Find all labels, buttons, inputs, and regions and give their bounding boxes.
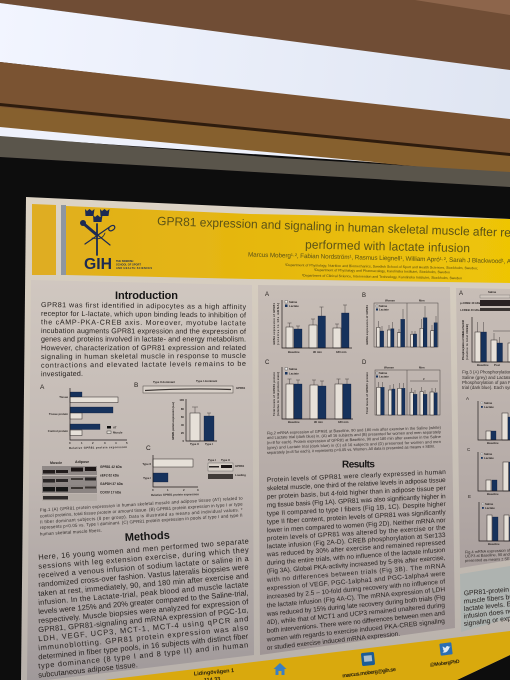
figure 3A: bar chart: Post (494, 363, 500, 367)
address: Lidingövägen 1 (194, 668, 234, 677)
text block: results: lactate infusion (Fig 2A-D). CREB phosphorylation at Ser133 (267, 532, 446, 550)
figure 2B: bar chart by sex (362, 293, 438, 347)
figure 1A: horizontal bar chart: Tissue protein (49, 412, 68, 416)
text block: results: type II compared to type I fibers (Fig 1B, 1C). Despite higher (267, 501, 447, 518)
figure 3A: phospho-CREB blot: Saline (488, 290, 497, 294)
text block: methods: type dominance (8 type I and 8 type II) and in human (38, 640, 249, 670)
icon: twitter (439, 642, 453, 656)
affiliations (285, 263, 478, 280)
figure 2D: bar chart by sex (362, 360, 440, 415)
figure 1B: fiber type bar chart: Type II (190, 442, 199, 446)
text block: methods: GPR81, GPR81-signaling and mRNA expression of PGC-1α, (38, 605, 249, 634)
figure 1: tissue western blots: GPR81 42 kDa (100, 465, 122, 469)
figure 1A: horizontal bar chart: Tissue (59, 395, 68, 399)
caption: figure 4: Fig.4 mRNA expression of (465, 547, 510, 554)
figure 3A: bar chart (461, 317, 510, 367)
poster sheet (21, 197, 510, 680)
figure 2C: bar chart: C (265, 360, 270, 366)
title: GPR81 expression and signaling in human skeletal muscle after re (157, 214, 510, 240)
icon: email (361, 652, 375, 666)
figure 1C: type pool bar chart: 1 (167, 488, 169, 492)
figure 2D: bar chart by sex: # (423, 377, 425, 381)
figure 2D: bar chart by sex: Saline (379, 371, 388, 375)
figure 1: tissue western blots: eEF2 62 kDa (100, 474, 119, 478)
figure 1C: type pool bar chart: Type II (142, 462, 151, 466)
text block: methods: determined in fiber type pools, in 16 subjects with distinct fiber (38, 632, 249, 661)
figure 1B: fiber type blot: Type II dominant (153, 380, 175, 384)
text block: results: type II fiber content, protein levels of GPR81 was significantly (267, 509, 447, 526)
text block: methods: infusion. In the Lactate-trial, peak blood and muscle lactate (38, 580, 249, 607)
figure 1B: fiber type bar chart: 40 (181, 423, 184, 427)
text block: results: protein levels of GPR81 was altered by the exercise or the (267, 525, 446, 542)
figure 2C: bar chart: Saline (289, 367, 298, 371)
text block: introduction: contractions and elevated lactate levels remains to be (41, 360, 246, 370)
caption: figure 1: II fiber dominant subjects (8 per group). Data is illustrated as means and individual values. * (40, 507, 243, 524)
text block: methods: sessions with leg extension exercise, during which they (38, 545, 249, 571)
heading: Methods: Methods (125, 530, 170, 544)
caption: figure 2: (grey) and Lactate trial (dark blue) in (C) all 16 subjects and (D) presented for women and men (267, 439, 441, 450)
text block: introduction: However, characterization of GPR81 expression and related (41, 344, 246, 352)
text block: methods: received a venous infusion of sodium lactate or saline in a (38, 554, 250, 580)
figure 4A: bar chart: Lactate (484, 405, 494, 409)
figure 1B: fiber type blot: Type I dominant (196, 379, 217, 383)
figure 1: tissue western blots: GAPDH 37 kDa (100, 482, 123, 486)
figure 1A: horizontal bar chart: Muscle (113, 430, 123, 434)
caption: figure 2: Fig.2 mRNA expression of GPR81 at Baseline, 90 and 180 min after exercise in the Saline (white) (267, 425, 442, 435)
figure 2A: bar chart: 180 min (336, 350, 347, 354)
text block: methods: immunoblotting. GPR81 protein expression was also (38, 623, 249, 652)
figure 2A: bar chart: Baseline (288, 350, 300, 354)
text block: introduction: investigated. (41, 370, 83, 378)
icon: three crowns (85, 209, 110, 222)
text block: methods: taken at rest, immediately, 90, and 180 min after exercise and (38, 571, 249, 598)
figure 1C: type pool blot: Type II (221, 458, 230, 462)
figure 1A: horizontal bar chart: A (40, 384, 45, 391)
text block: results: mg tissue basis (Fig 1A). GPR81 was also significantly higher in (267, 493, 446, 509)
panel: introduction, figure 1 and methods (27, 280, 254, 680)
figure 2A: bar chart: mRNA expression of GPR81 (272, 303, 276, 345)
authors: Marcus Moberg¹·², Fabian Nordström¹, Rasmus Liegnell¹, William Apró¹·², Sarah J Blackwood¹, A (248, 252, 510, 265)
figure 2A: bar chart: Lactate (289, 304, 299, 308)
figure 3A: phospho-CREB blot: t-CREB 40 kDa (460, 308, 480, 312)
caption: figure 2: and Lactate trial (dark blue) in, (A) all 16 subjects and (B) presented for women and men separately (267, 429, 441, 440)
caption: figure 1 (40, 495, 243, 536)
text block: results: during the entire trials, with no influence of the lactate infusion (267, 547, 446, 567)
figure 1C: type pool bar chart (142, 445, 199, 497)
text block: results: increased by 2.5 – 10-fold during recovery with no influence of (267, 578, 446, 601)
text block: methods: randomized cross-over fashion. Vastus lateralis biopsies were (38, 562, 249, 589)
figure 2C: bar chart: Total levels of GPR81 protein (272, 372, 276, 416)
text block: results: women with regards to exercise induced PKA-CREB signaling (265, 618, 446, 644)
text block: results: was reduced by 15% during late recovery during both trials (Fig (266, 594, 446, 618)
text block: results: per protein basis, but 4-fold higher than in adipose tissue per (267, 485, 447, 501)
text block: introduction: genes and proteins involved in lactate- and energy metabolism. (41, 336, 246, 344)
logo: GIH crest (80, 209, 152, 273)
text block: methods: LDH, VEGF, UCP3, MCT-1, MCT-4 using qPCR and (38, 614, 249, 643)
text block: introduction (41, 301, 247, 378)
text block: results: skeletal muscle, one third of the relative levels in adipose tissue (267, 477, 446, 492)
figure 1C: type pool blot (208, 458, 246, 479)
figure 2D: bar chart by sex: Women (384, 366, 394, 370)
figure 1C: type pool bar chart: Type I (143, 476, 151, 480)
figure 1A: horizontal bar chart: 4 (115, 441, 117, 445)
figure 4C: bar chart: C (467, 447, 471, 452)
figure 2D: bar chart by sex: Men (419, 366, 425, 370)
figure 2A: bar chart: Saline (289, 300, 298, 304)
figure 2B: bar chart by sex: mRNA expression of GPR81 (365, 305, 369, 345)
figure 1B: fiber type bar chart: 100 (179, 398, 184, 402)
figure 1C: type pool blot: Loading (235, 473, 246, 477)
logo tagline (116, 260, 152, 270)
figure 1A: horizontal bar chart: Relative GPR81 protein expression (69, 445, 127, 450)
figure 2C: bar chart: (relative to total protein stain) (276, 372, 280, 416)
text block: introduction: the cAMP-PKA-CREB axis. Moreover, myotube lactate (41, 318, 246, 327)
logo tagline: SCHOOL OF SPORT (116, 264, 141, 266)
logo tagline: THE SWEDISH (116, 260, 134, 263)
figure 4E: bar chart: Baseline (488, 542, 500, 546)
figure 3A: bar chart: Phosphorylation of CREB at Ser133 (461, 320, 465, 360)
text block: introduction: GPR81 was first identified in adipocytes as a high affinity (41, 301, 247, 311)
figure 4C: bar chart (467, 447, 510, 496)
text block: methods: levels were 125% and 20% greater compared to the Saline-trial, (38, 588, 249, 616)
caption: figure 2: (n=8 for each). Protein expression of GPR81 at Baseline, 90 and 180 min after exercise in the Saline (267, 434, 441, 445)
figure 1B: fiber type bar chart: 60 (181, 415, 184, 419)
text block: results: expression of VEGF, PGC-1alpha1 and PGC-1alpha4 were (267, 571, 446, 592)
figure 1B: fiber type bar chart: 20 (181, 431, 184, 435)
figure 2B: bar chart by sex: B (362, 293, 366, 299)
text block: methods (38, 537, 250, 680)
figure 4E: bar chart: Saline (485, 502, 494, 506)
caption: figure 2 (267, 425, 442, 455)
figure 1A: horizontal bar chart: Control protein (48, 429, 68, 433)
panel: figure 2 and results (258, 285, 455, 655)
figure 1A: horizontal bar chart (40, 384, 128, 450)
figure 2B: bar chart by sex: Women (385, 298, 395, 302)
figure 1C: type pool bar chart: 0 (152, 488, 154, 492)
text block: results: (Fig 3A). Global PKA-activity increased by 5-8% after exercise, (267, 555, 446, 575)
figure 1C: type pool bar chart: C (146, 445, 151, 452)
figure 2C: bar chart: 90 min (314, 420, 323, 424)
figure 2D: bar chart by sex: Total levels of GPR81 protein (365, 372, 369, 414)
figure 1C: type pool blot: GPR81 (235, 464, 245, 468)
figure 1C: type pool bar chart: 3 (197, 488, 199, 492)
figure 2B: bar chart by sex: Saline (379, 304, 388, 308)
figure 1A: horizontal bar chart: AT (113, 426, 117, 430)
figure 2A: bar chart (265, 292, 352, 354)
title: performed with lactate infusion (305, 238, 470, 255)
figure 3A: phospho-CREB blot (459, 290, 510, 312)
figure 3A: bar chart: (relative to total CREB) (465, 324, 469, 360)
icon: crossed club, sword and staff (80, 220, 115, 255)
figure 1B: fiber type blot: B (134, 382, 138, 389)
figure 2A: bar chart: (relative to 18s mRNA) (276, 303, 280, 345)
affiliations: ¹Department of Physiology, Nutrition and Biomechanics, Swedish School of Sport and Health Sciences, Stockholm, Sweden; (285, 263, 478, 270)
caption: figure 3 (462, 370, 510, 390)
figure 1B: fiber type blot: GPR81 (236, 386, 246, 390)
caption: figure 4 (465, 547, 510, 563)
text block: results: both interventions. There were no differences between men and (266, 610, 446, 635)
affiliations: ²Department of Physiology and Pharmacology, Karolinska Institutet, Stockholm, Sweden (314, 268, 450, 274)
figure 1C: type pool blot: Type I (208, 458, 216, 462)
figure 1A: horizontal bar chart: 1 (81, 441, 83, 445)
caption: figure 1: control proteins, total tissue protein or amount tissue. (B) GPR81 protein expression in type I or type (40, 501, 243, 518)
figure 1B: fiber type bar chart: 80 (181, 407, 184, 411)
text block: results: the lactate infusion (Fig 4A-C). The mRNA expression of LDH (267, 586, 446, 609)
figure 1B: fiber type bar chart: 0 (182, 439, 184, 443)
figure 1A: horizontal bar chart: 0 (69, 441, 71, 445)
figure 1B: fiber type bar chart (171, 398, 217, 446)
figure 3A: bar chart: Baseline (477, 363, 489, 367)
figure 1B: fiber type bar chart: GPR81 protein expression (a.u.) (171, 402, 175, 440)
footer bar (105, 631, 510, 680)
figure 4A: bar chart: A (466, 396, 469, 401)
figure 4A: bar chart: Saline (484, 401, 493, 405)
text block: results: lower in men compared to women (Fig 2D). Neither mRNA nor (267, 517, 447, 534)
panel: figures 3 and 4 (456, 288, 510, 568)
figure 4E: bar chart: Lactate (485, 506, 495, 510)
header banner (32, 204, 510, 283)
figure 2B: bar chart by sex: Lactate (379, 308, 389, 312)
text block: methods: subcutaneous adipose tissue. (38, 660, 138, 680)
figure 1A: horizontal bar chart: 2 (92, 441, 94, 445)
figure 3A: phospho-CREB blot: p-CREB 40 kDa (460, 301, 481, 305)
figure 4A: bar chart: Baseline (487, 441, 499, 445)
figure 1C: type pool bar chart: Relative GPR81 protein expression (151, 492, 199, 497)
caption: figure 2: separately (n=8 for each). # represents p<0.05 vs. Women. All data is presented as means ± SEM. (267, 444, 435, 455)
figure 4A: bar chart (466, 396, 510, 445)
twitter handle: @MobergPhD (430, 659, 460, 668)
figure 2C: bar chart: Lactate (289, 372, 299, 376)
email address: marcus.moberg@gih.se (342, 667, 396, 679)
figure 2A: bar chart: A (265, 292, 269, 298)
caption: figure 1: Fig.1 (A) GPR81 protein expression in human skeletal muscle and adipose tissue (AT) related to (40, 495, 243, 512)
heading: Introduction: Introduction (115, 290, 178, 302)
text block: results: with no differences between trials (Fig 3B). The mRNA (266, 563, 446, 584)
logo wordmark: GIH (84, 256, 112, 273)
text block: introduction: receptor for L-lactate, which upon binding leads to inhibition of (41, 310, 246, 319)
text block: results (265, 469, 447, 652)
figure 4C: bar chart: Lactate (484, 456, 494, 460)
panel: conclusion (460, 566, 510, 632)
figure 4E: bar chart: E (468, 494, 471, 499)
text block: results: or studied exercise induced mRNA expression. (266, 631, 401, 652)
text block: methods: Here, 16 young women and men performed two separate (38, 537, 249, 562)
figure 1: tissue western blots: Muscle (50, 461, 62, 465)
text block: methods: respectively. Muscle biopsies were analyzed for expression of (38, 597, 250, 625)
figure 1: tissue western blots: COXIV 17 kDa (100, 490, 121, 494)
figure 1C: type pool bar chart: 2 (183, 488, 185, 492)
caption: figure 1: represents p<0.05 vs. Type I dominant. (C) GPR81 protein expression in pools of type I and type II (40, 513, 243, 530)
figure 2D: bar chart by sex: D (362, 360, 367, 366)
figure 4C: bar chart: Baseline (487, 492, 499, 496)
figure 1: tissue western blots: Adipose (75, 460, 89, 464)
figure 2A: bar chart: 90 min (313, 350, 322, 354)
figure 2C: bar chart: 180 min (338, 420, 349, 424)
figure 3A: phospho-CREB blot: A (459, 291, 463, 297)
figure 4C: bar chart: Saline (484, 452, 493, 456)
text block: introduction: incubation augments GPR81 expression and the expression of (41, 327, 246, 336)
heading: Results: Results (342, 459, 375, 470)
logo tagline: AND HEALTH SCIENCES (116, 267, 152, 270)
figure 1A: horizontal bar chart: 3 (104, 441, 106, 445)
affiliations: ³Department of Clinical Science, Intervention and Technology, Karolinska Institutet, Stockholm, Sweden (302, 274, 462, 280)
figure 1B: fiber type blot (134, 379, 246, 393)
text block: results: was reduced by 30% after exercise and remained repressed (266, 539, 446, 559)
icon: home (274, 663, 286, 675)
caption: figure 1: human skeletal muscle fibers. (40, 528, 102, 536)
figure 1A: horizontal bar chart: 5 (126, 441, 128, 445)
figure 2C: bar chart (265, 360, 353, 424)
text block: introduction: signaling in human skeletal muscle in response to muscle (41, 352, 246, 361)
figure 4E: bar chart (468, 494, 510, 546)
text block: results: 4D), while that of MCT1 and UCP3 remained unaltered during (267, 602, 446, 626)
figure 2B: bar chart by sex: Men (419, 298, 425, 302)
figure 2D: bar chart by sex: Lactate (379, 374, 389, 378)
figure 2C: bar chart: Baseline (288, 420, 300, 424)
figure 1: tissue western blots (42, 460, 123, 501)
figure 1B: fiber type bar chart: Type I (205, 442, 213, 446)
title (157, 214, 510, 255)
text block: results: Protein levels of GPR81 were clearly expressed in human (267, 469, 446, 484)
